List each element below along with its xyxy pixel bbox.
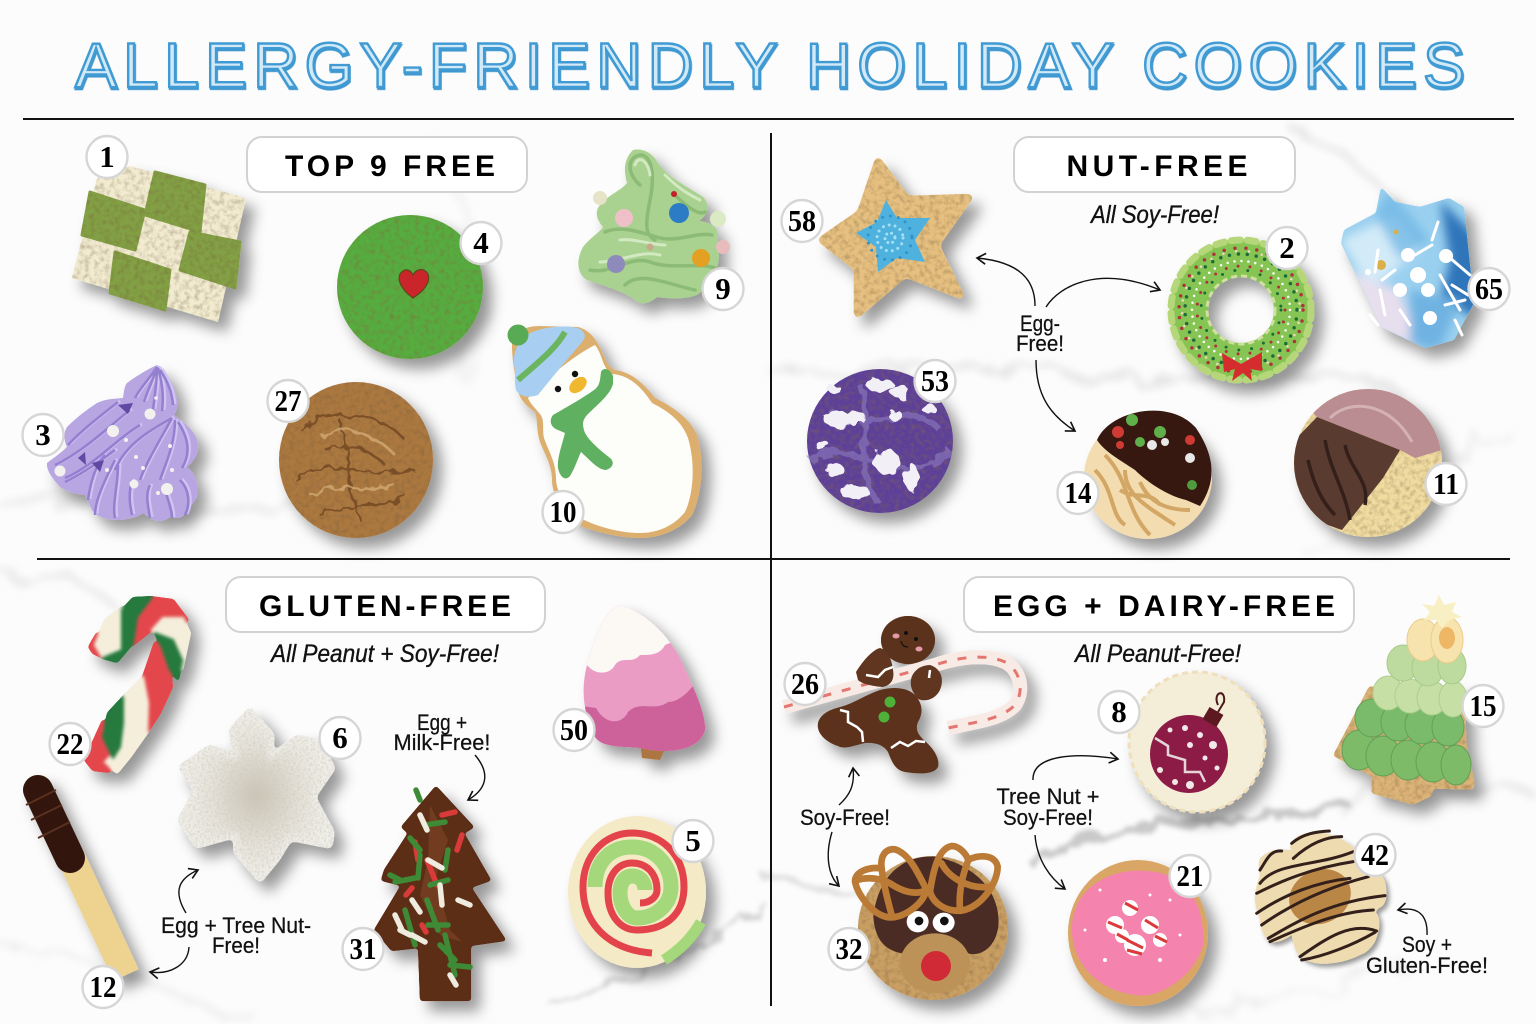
badge 21: 21 xyxy=(1176,858,1204,893)
cookie 22: candy cane xyxy=(50,597,190,773)
cookie 12: chocolate-dipped stick xyxy=(26,790,126,1008)
label: egg-free: Free! xyxy=(1016,331,1064,356)
badge 65 xyxy=(1468,268,1510,310)
cookie 21: pink frosted peppermint xyxy=(1068,855,1210,1006)
badge 6: 6 xyxy=(332,720,348,755)
label: tree nut + soy-free xyxy=(996,784,1100,830)
cookie 5: pinwheel xyxy=(568,816,714,968)
badge 32: 32 xyxy=(836,931,862,966)
label: tree nut + soy-free: Tree Nut + xyxy=(996,784,1100,809)
panel: nut-free xyxy=(782,137,1510,539)
badge 1 xyxy=(86,136,128,178)
badge 58: 58 xyxy=(788,203,816,238)
badge 32 xyxy=(828,928,870,970)
badge 1: 1 xyxy=(99,139,115,174)
cookie 3: purple frosting tree xyxy=(22,365,198,521)
heading: top 9 free xyxy=(247,137,527,192)
heading: nut-free: NUT-FREE xyxy=(1066,150,1248,183)
cookie 14: chocolate-dipped swirl xyxy=(1058,411,1212,539)
badge 15 xyxy=(1462,685,1504,727)
label: egg + tree nut-free: Egg + Tree Nut- xyxy=(161,913,311,938)
badge 8 xyxy=(1098,691,1140,733)
badge 5: 5 xyxy=(685,823,701,858)
badge 65: 65 xyxy=(1475,271,1503,306)
arrows: soy-free xyxy=(828,768,853,886)
panel: egg + dairy-free xyxy=(784,577,1504,1006)
panel: top 9 free xyxy=(22,136,744,538)
badge 22: 22 xyxy=(56,726,84,761)
badge 9: 9 xyxy=(715,271,731,306)
label: soy + gluten-free: Soy + xyxy=(1402,932,1452,957)
arrows: tree nut + soy-free xyxy=(1033,756,1118,889)
cookie 26: gingerbread with candy cane xyxy=(784,616,1020,773)
label: egg-free xyxy=(1016,311,1064,356)
badge 4 xyxy=(460,222,502,264)
badge 27: 27 xyxy=(274,383,302,418)
heading: egg + dairy-free: EGG + DAIRY-FREE xyxy=(993,590,1335,623)
cookie 2: wreath xyxy=(1171,227,1311,381)
label: soy-free: Soy-Free! xyxy=(800,805,890,830)
badge 53 xyxy=(914,360,956,402)
cookie 8: ornament xyxy=(1098,672,1265,812)
badge 12 xyxy=(82,966,124,1008)
arrow: to cookie 31 xyxy=(468,755,485,800)
cookie 15: green frosting tree xyxy=(1335,595,1504,803)
label: soy + gluten-free: Gluten-Free! xyxy=(1366,953,1488,978)
label: soy + gluten-free xyxy=(1366,932,1488,978)
subheading: all soy-free: All Soy-Free! xyxy=(1089,201,1219,229)
badge 15: 15 xyxy=(1470,688,1496,723)
cookie 53: purple crinkle xyxy=(807,360,956,513)
badge 31: 31 xyxy=(350,931,376,966)
badge 3: 3 xyxy=(35,417,51,452)
arrows: egg + tree nut-free xyxy=(150,870,198,973)
heading: nut-free xyxy=(1014,137,1295,192)
subheading: all peanut + soy-free: All Peanut + Soy-Free! xyxy=(269,640,499,668)
badge 22 xyxy=(50,723,90,765)
cookie 27: gingersnap xyxy=(268,380,433,538)
heading: gluten-free xyxy=(226,577,545,632)
cookie 11: neapolitan xyxy=(1285,380,1466,537)
heading: egg + dairy-free xyxy=(964,577,1354,632)
badge 50: 50 xyxy=(560,712,588,747)
cookie 4: green with heart xyxy=(337,215,502,359)
badge 58 xyxy=(782,200,822,242)
badge 26 xyxy=(784,663,826,705)
badge 27 xyxy=(268,380,308,422)
cookie 50: pink tree xyxy=(554,595,715,770)
heading: top 9 free: TOP 9 FREE xyxy=(285,150,495,183)
badge 26: 26 xyxy=(791,666,819,701)
cookie 65: blue dreidel xyxy=(1341,187,1510,350)
badge 2 xyxy=(1266,227,1308,269)
badge 14: 14 xyxy=(1064,475,1092,510)
label: tree nut + soy-free: Soy-Free! xyxy=(1003,805,1093,830)
badge 10 xyxy=(542,491,584,533)
label: egg + milk-free xyxy=(394,710,490,755)
label: egg-free: Egg- xyxy=(1020,311,1060,336)
badge 2: 2 xyxy=(1279,230,1295,265)
label: egg + tree nut-free xyxy=(161,913,311,958)
badge 4: 4 xyxy=(473,225,489,260)
badge 10: 10 xyxy=(550,494,576,529)
arrows: egg-free xyxy=(977,258,1160,431)
badge 53: 53 xyxy=(921,363,949,398)
badge 9 xyxy=(702,268,744,310)
badge 21 xyxy=(1170,855,1210,897)
subheading: all peanut-free: All Peanut-Free! xyxy=(1073,640,1241,668)
cookie 6: snowflake xyxy=(180,710,360,880)
cookie 32: reindeer xyxy=(828,846,1008,1000)
cookie 9: green meringue tree xyxy=(578,150,744,310)
cookie 42: caramel drizzle xyxy=(1255,831,1396,964)
badge 6 xyxy=(320,717,360,759)
badge 42: 42 xyxy=(1361,837,1389,872)
title: ALLERGY-FRIENDLY HOLIDAY COOKIES xyxy=(75,31,1465,101)
label: egg + milk-free: Milk-Free! xyxy=(394,730,490,755)
label: egg + milk-free: Egg + xyxy=(417,710,467,735)
arrow: to cookie 42 xyxy=(1398,909,1427,935)
badge 31 xyxy=(342,928,384,970)
panel: gluten-free xyxy=(26,577,715,1008)
badge 11: 11 xyxy=(1433,466,1459,501)
badge 3 xyxy=(22,414,64,456)
heading: gluten-free: GLUTEN-FREE xyxy=(259,590,511,623)
badge 50 xyxy=(554,709,594,751)
label: egg + tree nut-free: Free! xyxy=(212,933,260,958)
badge 14 xyxy=(1058,472,1098,514)
cookie 1: green checkerboard xyxy=(72,136,246,322)
badge 11 xyxy=(1426,463,1466,505)
cookie 10: snowman xyxy=(508,324,702,538)
badge 8: 8 xyxy=(1111,694,1127,729)
cookie 31: chocolate tree xyxy=(342,787,505,1000)
cookie 58: star xyxy=(782,160,970,315)
badge 5 xyxy=(672,820,714,862)
badge 42 xyxy=(1354,834,1396,876)
badge 12: 12 xyxy=(90,969,116,1004)
